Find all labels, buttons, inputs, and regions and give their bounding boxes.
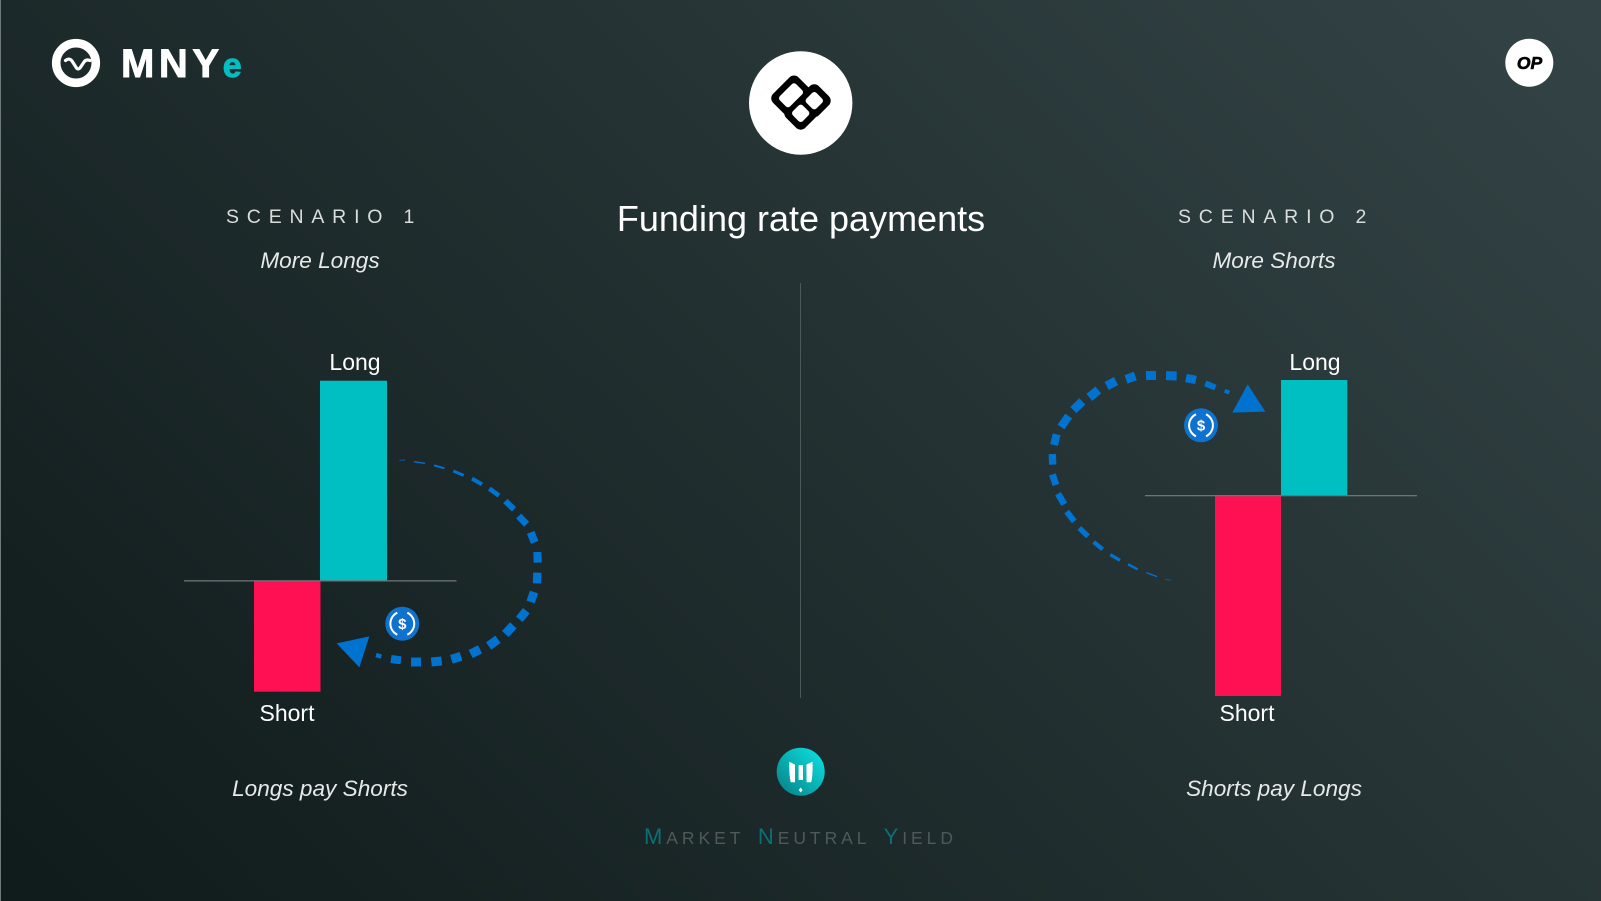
baseline	[184, 580, 456, 582]
footer logo: Market Neutral Yield	[644, 748, 957, 849]
label: long: Long	[329, 349, 381, 375]
bar: long	[320, 381, 387, 581]
label: long: Long	[1289, 349, 1341, 375]
icon: MNYe ring	[56, 43, 96, 83]
bar: short	[254, 581, 320, 692]
arrow: shorts to longs	[1052, 375, 1265, 580]
wordmark: MNYe	[121, 42, 242, 86]
subheading: more longs: More Longs	[260, 248, 380, 273]
caption: longs pay shorts: Longs pay Shorts	[232, 776, 408, 801]
badge: OP: OP	[1517, 53, 1542, 73]
icon: USDC coin: $	[398, 616, 407, 633]
icon: USDC coin: $	[1197, 418, 1206, 435]
bar: long	[1281, 380, 1347, 496]
panel: scenario 1	[184, 206, 538, 801]
icon: protocol logo	[749, 51, 852, 155]
heading: scenario 1: SCENARIO 1	[226, 206, 422, 228]
label: short: Short	[260, 700, 315, 726]
baseline	[1145, 495, 1417, 496]
label: short: Short	[1220, 700, 1275, 726]
panel: scenario 2	[1052, 206, 1417, 801]
heading: scenario 2: SCENARIO 2	[1178, 206, 1374, 228]
bar: short	[1215, 496, 1281, 696]
wordmark: MARKET NEUTRAL YIELD	[644, 824, 957, 849]
logo: MNYe	[56, 42, 242, 86]
badge: OP	[1505, 39, 1553, 87]
title: Funding rate payments	[617, 198, 985, 239]
icon: market neutral yield	[777, 748, 825, 796]
icon: USDC coin	[385, 607, 419, 641]
subheading: more shorts: More Shorts	[1212, 248, 1336, 273]
divider	[800, 283, 801, 698]
arrow: longs to shorts	[337, 460, 538, 667]
icon: USDC coin	[1184, 408, 1218, 442]
caption: shorts pay longs: Shorts pay Longs	[1186, 776, 1362, 801]
